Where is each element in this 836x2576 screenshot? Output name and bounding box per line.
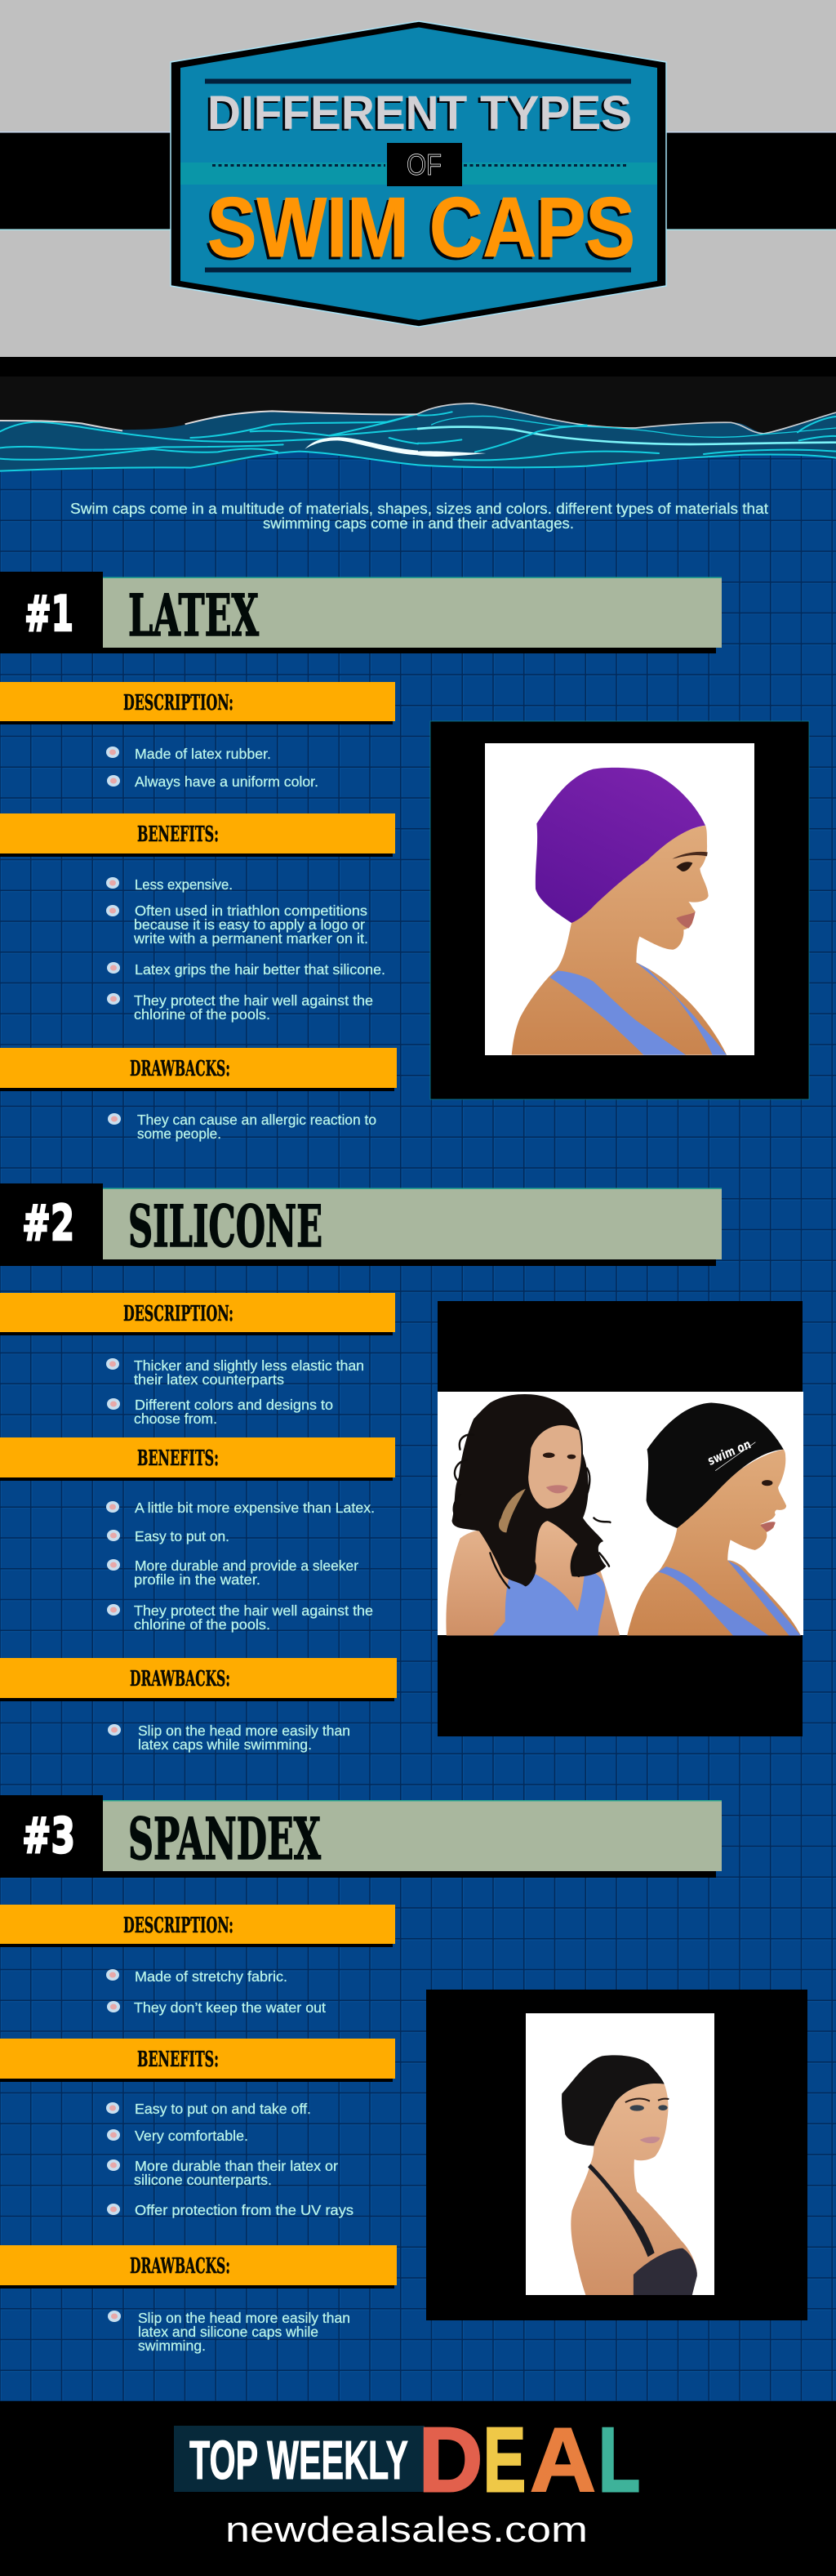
description bullets: Made of stretchy fabric. [135,1968,287,1985]
title: of box: OF [407,148,442,181]
benefits bullets: chlorine of the pools. [134,1616,270,1633]
benefits bullets: Often used in triathlon competitions [135,902,367,919]
benefits bullets: Less expensive. [135,876,233,893]
benefits bullets: They protect the hair well against the [134,1602,373,1619]
benefits bullets: Very comfortable. [135,2128,248,2144]
description bullets: Made of latex rubber. [135,746,271,762]
drawbacks bar: DRAWBACKS: [130,2254,230,2279]
drawbacks bullets: swimming. [138,2338,206,2354]
drawbacks bullets: latex and silicone caps while [138,2324,318,2340]
description bullets: Different colors and designs to [135,1397,333,1413]
benefits bullets [106,1500,375,1633]
description bar: DESCRIPTION: [123,1914,233,1938]
drawbacks bar [0,1658,397,1701]
heading: spandex: #3 [22,1807,75,1865]
left woman [446,1518,620,1635]
heading: silicone [0,1183,722,1266]
drawbacks bar [0,2245,397,2289]
description bar: DESCRIPTION: [123,1302,233,1326]
drawbacks bar: DRAWBACKS: [130,1057,230,1081]
photo: woman with curly hair and woman in black silicone cap: swim on [705,1437,753,1468]
title badge [171,21,666,327]
benefits bullets: Offer protection from the UV rays [135,2202,354,2218]
description bullets [106,1357,364,1427]
footer logo: top weekly deal [174,2409,640,2511]
footer logo: top weekly deal: L [598,2409,640,2511]
description bar [0,1905,395,1947]
benefits bar [0,2039,395,2082]
footer logo: top weekly deal: A [530,2409,596,2511]
heading: spandex [0,1795,722,1878]
description bullets: They don’t keep the water out [134,1999,326,2016]
title: swim caps: SWIM CAPS [207,180,635,275]
benefits bullets: More durable and provide a sleeker [135,1558,358,1574]
benefits bar: BENEFITS: [137,1446,219,1471]
heading: latex: LATEX [128,582,259,649]
dark band above water [0,357,836,442]
right woman [627,1450,801,1635]
description bar: DESCRIPTION: [123,691,233,715]
description bullets: Always have a uniform color. [135,773,318,790]
drawbacks bullets: Slip on the head more easily than [138,2310,350,2326]
benefits bar: BENEFITS: [137,822,219,847]
tiled pool background [0,392,836,2401]
photo: woman with curly hair and woman in black silicone cap [438,1301,803,1736]
drawbacks bullets [108,1723,350,1753]
footer logo: top weekly deal: E [483,2409,526,2511]
heading: spandex: SPANDEX [128,1805,321,1873]
benefits bar [0,1437,395,1481]
panel: spandex [0,1795,807,2354]
panel: latex [0,572,809,1142]
description bullets [106,746,318,790]
heading: silicone: #2 [22,1195,74,1252]
footer logo: top weekly deal: D [419,2409,482,2511]
panel: silicone [0,1183,803,1753]
benefits bullets: because it is easy to apply a logo or [134,916,365,933]
intro text: Swim caps come in a multitude of materials, shapes, sizes and colors. different types of materials that [70,500,768,517]
benefits bullets: More durable than their latex or [135,2158,338,2174]
drawbacks bar [0,1048,397,1091]
benefits bullets: chlorine of the pools. [134,1006,270,1023]
benefits bullets: write with a permanent marker on it. [133,930,368,947]
heading: latex: #1 [24,586,73,643]
photo: woman in purple latex cap [430,721,809,1099]
benefits bullets: profile in the water. [134,1571,260,1588]
drawbacks bullets: some people. [137,1125,221,1142]
description bullets [106,1968,326,2016]
benefits bullets [106,2101,354,2218]
intro text [70,500,768,532]
photo: woman in black spandex cap [426,1990,807,2320]
header background bands [0,0,836,357]
benefits bullets: silicone counterparts. [134,2172,272,2188]
description bar [0,1293,395,1335]
description bullets: Thicker and slightly less elastic than [134,1357,364,1374]
title: of box [387,143,462,186]
drawbacks bullets [108,1112,376,1142]
drawbacks bullets: They can cause an allergic reaction to [137,1112,376,1128]
benefits bullets: Easy to put on. [135,1528,229,1544]
benefits bar [0,813,395,857]
intro text: swimming caps come in and their advantages. [263,515,574,532]
footer website: newdealsales.com [225,2510,588,2550]
description bullets: choose from. [134,1411,217,1427]
water waves [0,403,836,471]
drawbacks bullets: latex caps while swimming. [138,1736,312,1753]
heading: silicone: SILICONE [128,1192,322,1260]
footer band [0,2401,836,2576]
benefits bullets: Latex grips the hair better that silicone. [135,961,385,978]
drawbacks bullets [108,2310,350,2354]
drawbacks bar: DRAWBACKS: [130,1667,230,1691]
drawbacks bullets: Slip on the head more easily than [138,1723,350,1739]
heading: latex [0,572,722,653]
benefits bullets: Easy to put on and take off. [135,2101,311,2117]
benefits bar: BENEFITS: [137,2048,219,2072]
benefits bullets: They protect the hair well against the [134,992,373,1009]
description bar [0,682,395,724]
benefits bullets: A little bit more expensive than Latex. [135,1500,375,1516]
benefits bullets [106,876,385,1023]
footer logo: top weekly deal: TOP WEEKLY [189,2430,408,2491]
title: different types: DIFFERENT TYPES [207,87,632,140]
description bullets: their latex counterparts [134,1371,284,1388]
